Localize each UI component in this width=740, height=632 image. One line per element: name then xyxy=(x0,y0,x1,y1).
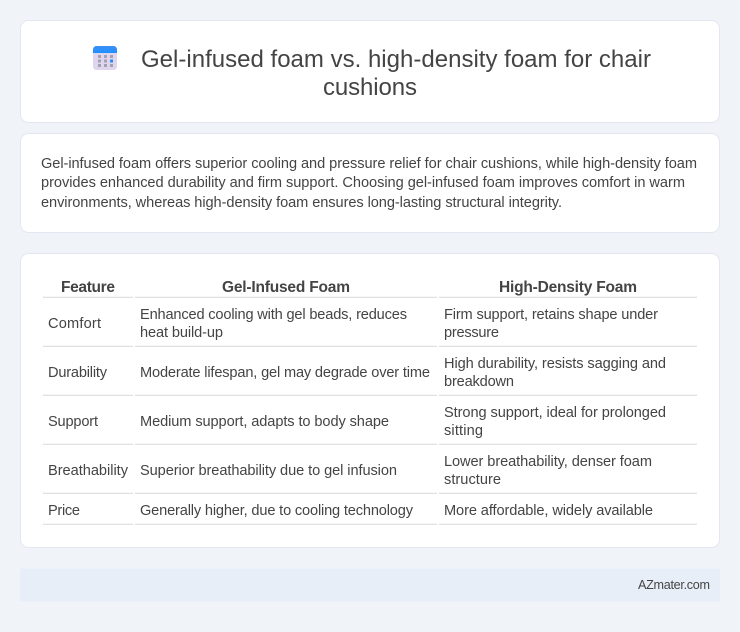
footer xyxy=(20,568,720,602)
text block: summary: Gel-infused foam offers superior cooling and pressure relief for chair cushions, while high-density foam xyxy=(41,156,697,172)
row: breathability xyxy=(43,454,697,493)
table header: High-Density Foam xyxy=(499,279,637,296)
row: comfort: Firm support, retains shape under xyxy=(444,307,658,323)
text block: summary: environments, whereas high-density foam ensures long-lasting structural integrity. xyxy=(41,195,562,211)
row: support: Support xyxy=(48,414,98,430)
table header: Gel-Infused Foam xyxy=(222,279,350,296)
row: comfort: heat build-up xyxy=(140,325,223,341)
table header: Feature xyxy=(61,279,115,296)
row: durability xyxy=(43,356,697,395)
heading: Gel-infused foam vs. high-density foam for chair xyxy=(141,46,651,73)
row: durability: breakdown xyxy=(444,374,514,390)
row: breathability: Superior breathability due to gel infusion xyxy=(140,463,397,479)
footer credit: AZmater.com xyxy=(638,578,710,592)
text block: summary: provides enhanced durability and firm support. Choosing gel-infused foam improves comfort in warm xyxy=(41,175,685,191)
row: comfort: Enhanced cooling with gel beads, reduces xyxy=(140,307,407,323)
row: comfort xyxy=(43,307,697,346)
row: comfort: pressure xyxy=(444,325,499,341)
heading: cushions xyxy=(323,74,417,101)
row: durability: Moderate lifespan, gel may degrade over time xyxy=(140,365,430,381)
row: price: More affordable, widely available xyxy=(444,503,653,519)
row: support xyxy=(43,405,697,444)
row: durability: High durability, resists sagging and xyxy=(444,356,666,372)
row: breathability: Lower breathability, denser foam xyxy=(444,454,652,470)
table header xyxy=(43,279,697,297)
panel: comparison table xyxy=(20,254,720,548)
row: price xyxy=(43,503,697,524)
text block: summary xyxy=(41,156,697,211)
icon: calendar xyxy=(93,46,117,70)
row: support: Strong support, ideal for prolonged xyxy=(444,405,666,421)
panel: title xyxy=(20,20,720,122)
heading xyxy=(141,46,651,101)
row: support: sitting xyxy=(444,423,483,439)
panel: introduction xyxy=(20,134,720,232)
row: durability: Durability xyxy=(48,365,108,381)
row: price: Generally higher, due to cooling technology xyxy=(140,503,414,519)
row: breathability: structure xyxy=(444,472,501,488)
row: breathability: Breathability xyxy=(48,463,129,479)
row: support: Medium support, adapts to body shape xyxy=(140,414,389,430)
row: price: Price xyxy=(48,503,80,519)
row: comfort: Comfort xyxy=(48,316,101,332)
